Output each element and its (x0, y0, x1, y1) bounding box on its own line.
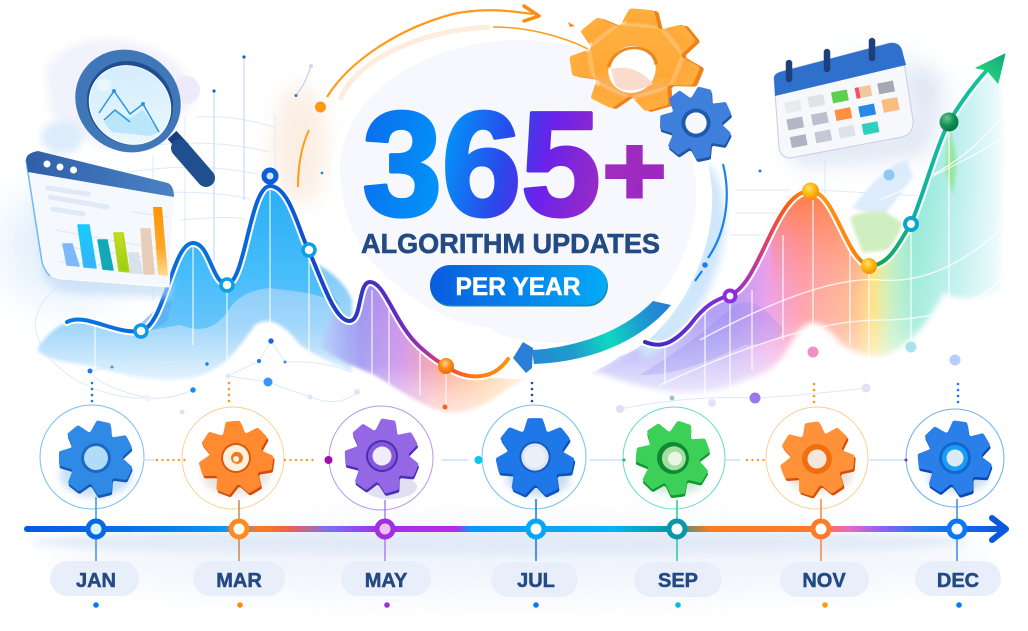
icon: calendar (774, 41, 940, 168)
arrow: orange circular arrow (298, 6, 588, 187)
label: JUL (491, 562, 578, 597)
label: MAR (193, 561, 285, 596)
title: 365+: + (603, 116, 666, 225)
gear: SEP (623, 407, 725, 509)
panel: right wave chart area (590, 58, 1003, 395)
label: SEP (634, 562, 722, 597)
right chart line (645, 54, 1005, 345)
icon: timeline arrowhead (992, 518, 1006, 540)
panel: left wave chart area (37, 186, 525, 413)
label: MAY: MAY (365, 570, 408, 592)
label: MAR: MAR (216, 570, 262, 592)
icon: small blue gear (650, 79, 742, 171)
scattered dots and network lines (88, 170, 960, 430)
connector end dots (324, 456, 908, 464)
gear: NOV (766, 407, 868, 509)
label: NOV: NOV (802, 570, 846, 592)
gear: JAN (40, 405, 144, 509)
central white blob (332, 30, 714, 380)
label: NOV (780, 562, 869, 597)
vertical stems (96, 497, 957, 561)
window header (26, 151, 174, 197)
gear: JUL (482, 405, 586, 509)
panel: browser window chart (26, 151, 174, 298)
gear: MAY (329, 406, 433, 510)
arrow: blue arc (695, 164, 727, 281)
gear: DEC (906, 409, 1004, 507)
bottom dots (93, 602, 962, 608)
subtitle: algorithm updates: ALGORITHM UPDATES (361, 228, 660, 259)
label: JAN (50, 561, 139, 596)
gear: MAR (182, 407, 284, 509)
icon: magnifying glass (55, 29, 206, 178)
label: DEC (915, 561, 1001, 596)
arrow: teal return arrow (513, 301, 671, 373)
title: 365+: 365 (362, 82, 600, 247)
right chart nodes (724, 112, 958, 302)
bars (63, 207, 168, 276)
left chart line (67, 170, 508, 376)
badge: per year (430, 265, 608, 306)
badge: per year: PER YEAR (456, 273, 580, 301)
label: JUL: JUL (517, 570, 555, 592)
calendar cells (783, 80, 903, 149)
thin vertical markers upper left (212, 55, 323, 300)
icon: large orange gear (561, 4, 713, 119)
timeline bar (27, 518, 1006, 555)
icon: green arrow tip (976, 54, 1005, 83)
label: JAN: JAN (76, 570, 116, 592)
label: SEP: SEP (658, 570, 698, 592)
timeline nodes (88, 521, 965, 537)
connectors: dotted lines (92, 383, 958, 460)
label: MAY (341, 561, 431, 596)
label: DEC: DEC (937, 570, 979, 592)
calendar header (774, 43, 906, 96)
